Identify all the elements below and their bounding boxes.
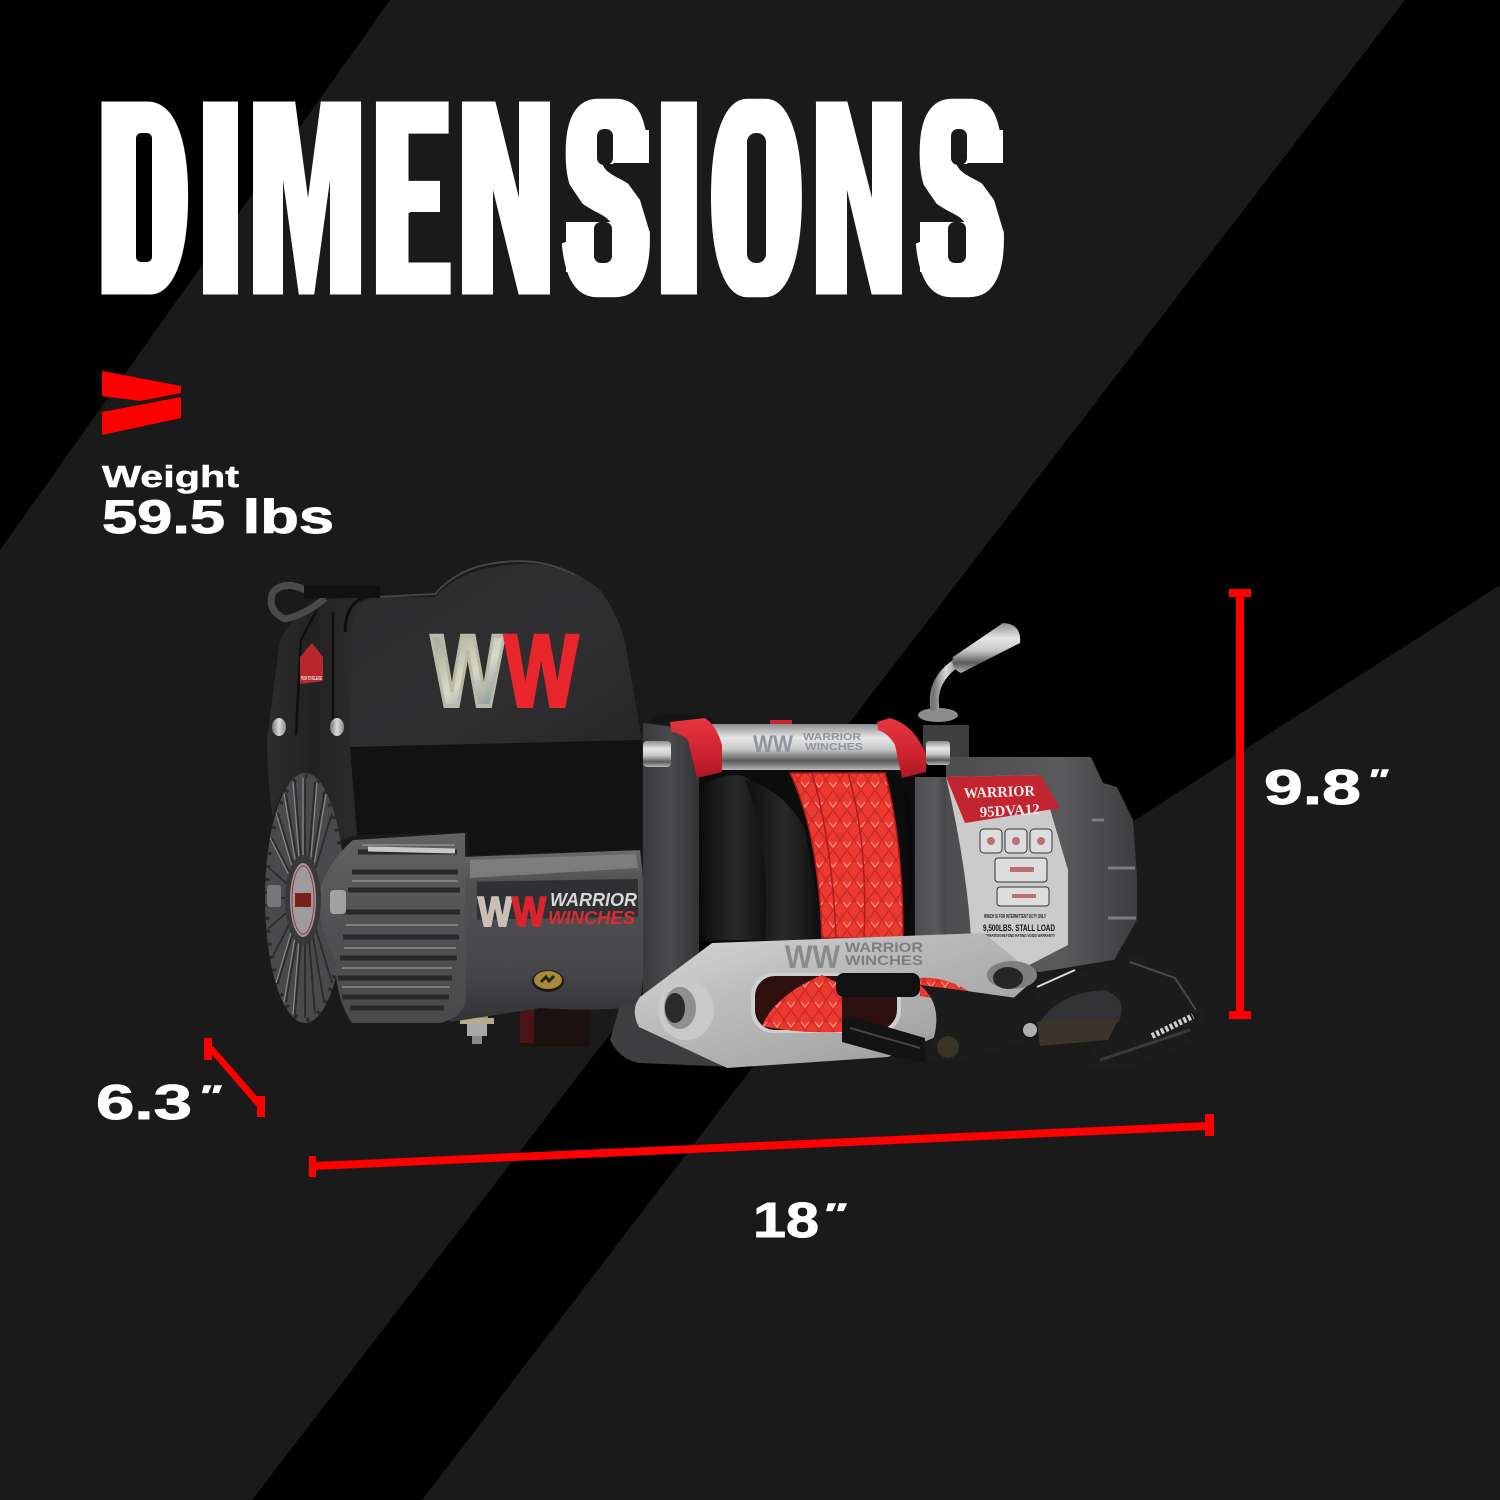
hawse fairlead: WARRIOR [845,939,923,955]
rope drum with black sleeve [696,770,920,942]
dimension label: 9.8: " [1366,764,1389,797]
motor warning label [946,775,1068,975]
motor housing body [450,850,645,1022]
title: I [204,42,237,354]
dimension: height line 9.8 [1229,589,1251,1019]
motor warning label: WINCH IS FOR INTERMITTENT DUTY ONLY [984,914,1046,920]
cover main shell [296,561,642,747]
hawse fairlead [635,933,1037,1068]
brass screw [532,970,564,992]
weight text block: 59.5 lbs [102,490,334,543]
title [101,98,1004,298]
motor cylinder [946,757,1137,972]
cover side panel [267,596,360,840]
side logo plate: WW [478,888,546,935]
title: M [253,42,361,354]
push to release label [300,643,323,684]
title: E [378,42,446,354]
side logo plate: WARRIOR [550,890,637,910]
cover screws [272,718,344,736]
winch illustration: PUSH TO RELEASE [301,676,322,682]
weight text block: Weight [102,459,239,494]
mounting foot and bolt [460,1005,590,1047]
dimension label: 18: 18 [753,1194,819,1248]
motor warning label: OPERATION BEYOND RATING VOIDS WARRANTY [983,933,1055,938]
weight text block [102,459,334,543]
strap loop [271,585,380,619]
title: D [103,42,184,354]
tie bar with chrome tube: WW [753,731,793,758]
title: I [662,42,696,354]
title: S [568,42,646,354]
title: N [463,42,549,354]
dimension label: 18: " [821,1198,847,1231]
frame foot [610,1000,735,1067]
title: N [817,42,901,354]
winch illustration [265,561,1204,1068]
hawse fairlead: WINCHES [845,952,923,968]
title: O [716,42,797,354]
strap above tie bar [647,713,712,724]
fan disc [265,773,345,1023]
tie bar with chrome tube: WINCHES [805,742,863,753]
side logo plate: WINCHES [548,908,635,928]
dimension label: 6.3: 6.3 [96,1076,192,1130]
hawse fairlead: WW [785,939,841,975]
motor warning label: WARRIOR [964,784,1035,802]
motor warning label: 9,500LBS. STALL LOAD [983,923,1055,933]
hook and clevis [836,957,1204,1066]
winch frame posts [643,723,950,1000]
rope end through fairlead [762,975,999,1032]
dimension label: 6.3: " [197,1080,222,1113]
handle lever [918,623,1020,757]
cover WW emblem: WW [431,614,579,728]
cover lower black band [350,740,642,855]
dimension: width line 18 [309,1114,1214,1177]
tie bar with chrome tube: WARRIOR [803,732,862,743]
icon: weight chevron [102,371,181,435]
text: S [922,42,1000,354]
motor warning label: 95DVA12 [979,802,1040,821]
dimension label: 9.8: 9.8 [1264,761,1361,815]
red synthetic rope [790,773,903,938]
dimension: depth line 6.3 [204,1038,265,1117]
side logo plate [477,879,638,935]
fan hub and bolts [267,855,346,945]
tie bar with chrome tube [643,718,950,778]
finned gearbox housing [318,833,466,1023]
